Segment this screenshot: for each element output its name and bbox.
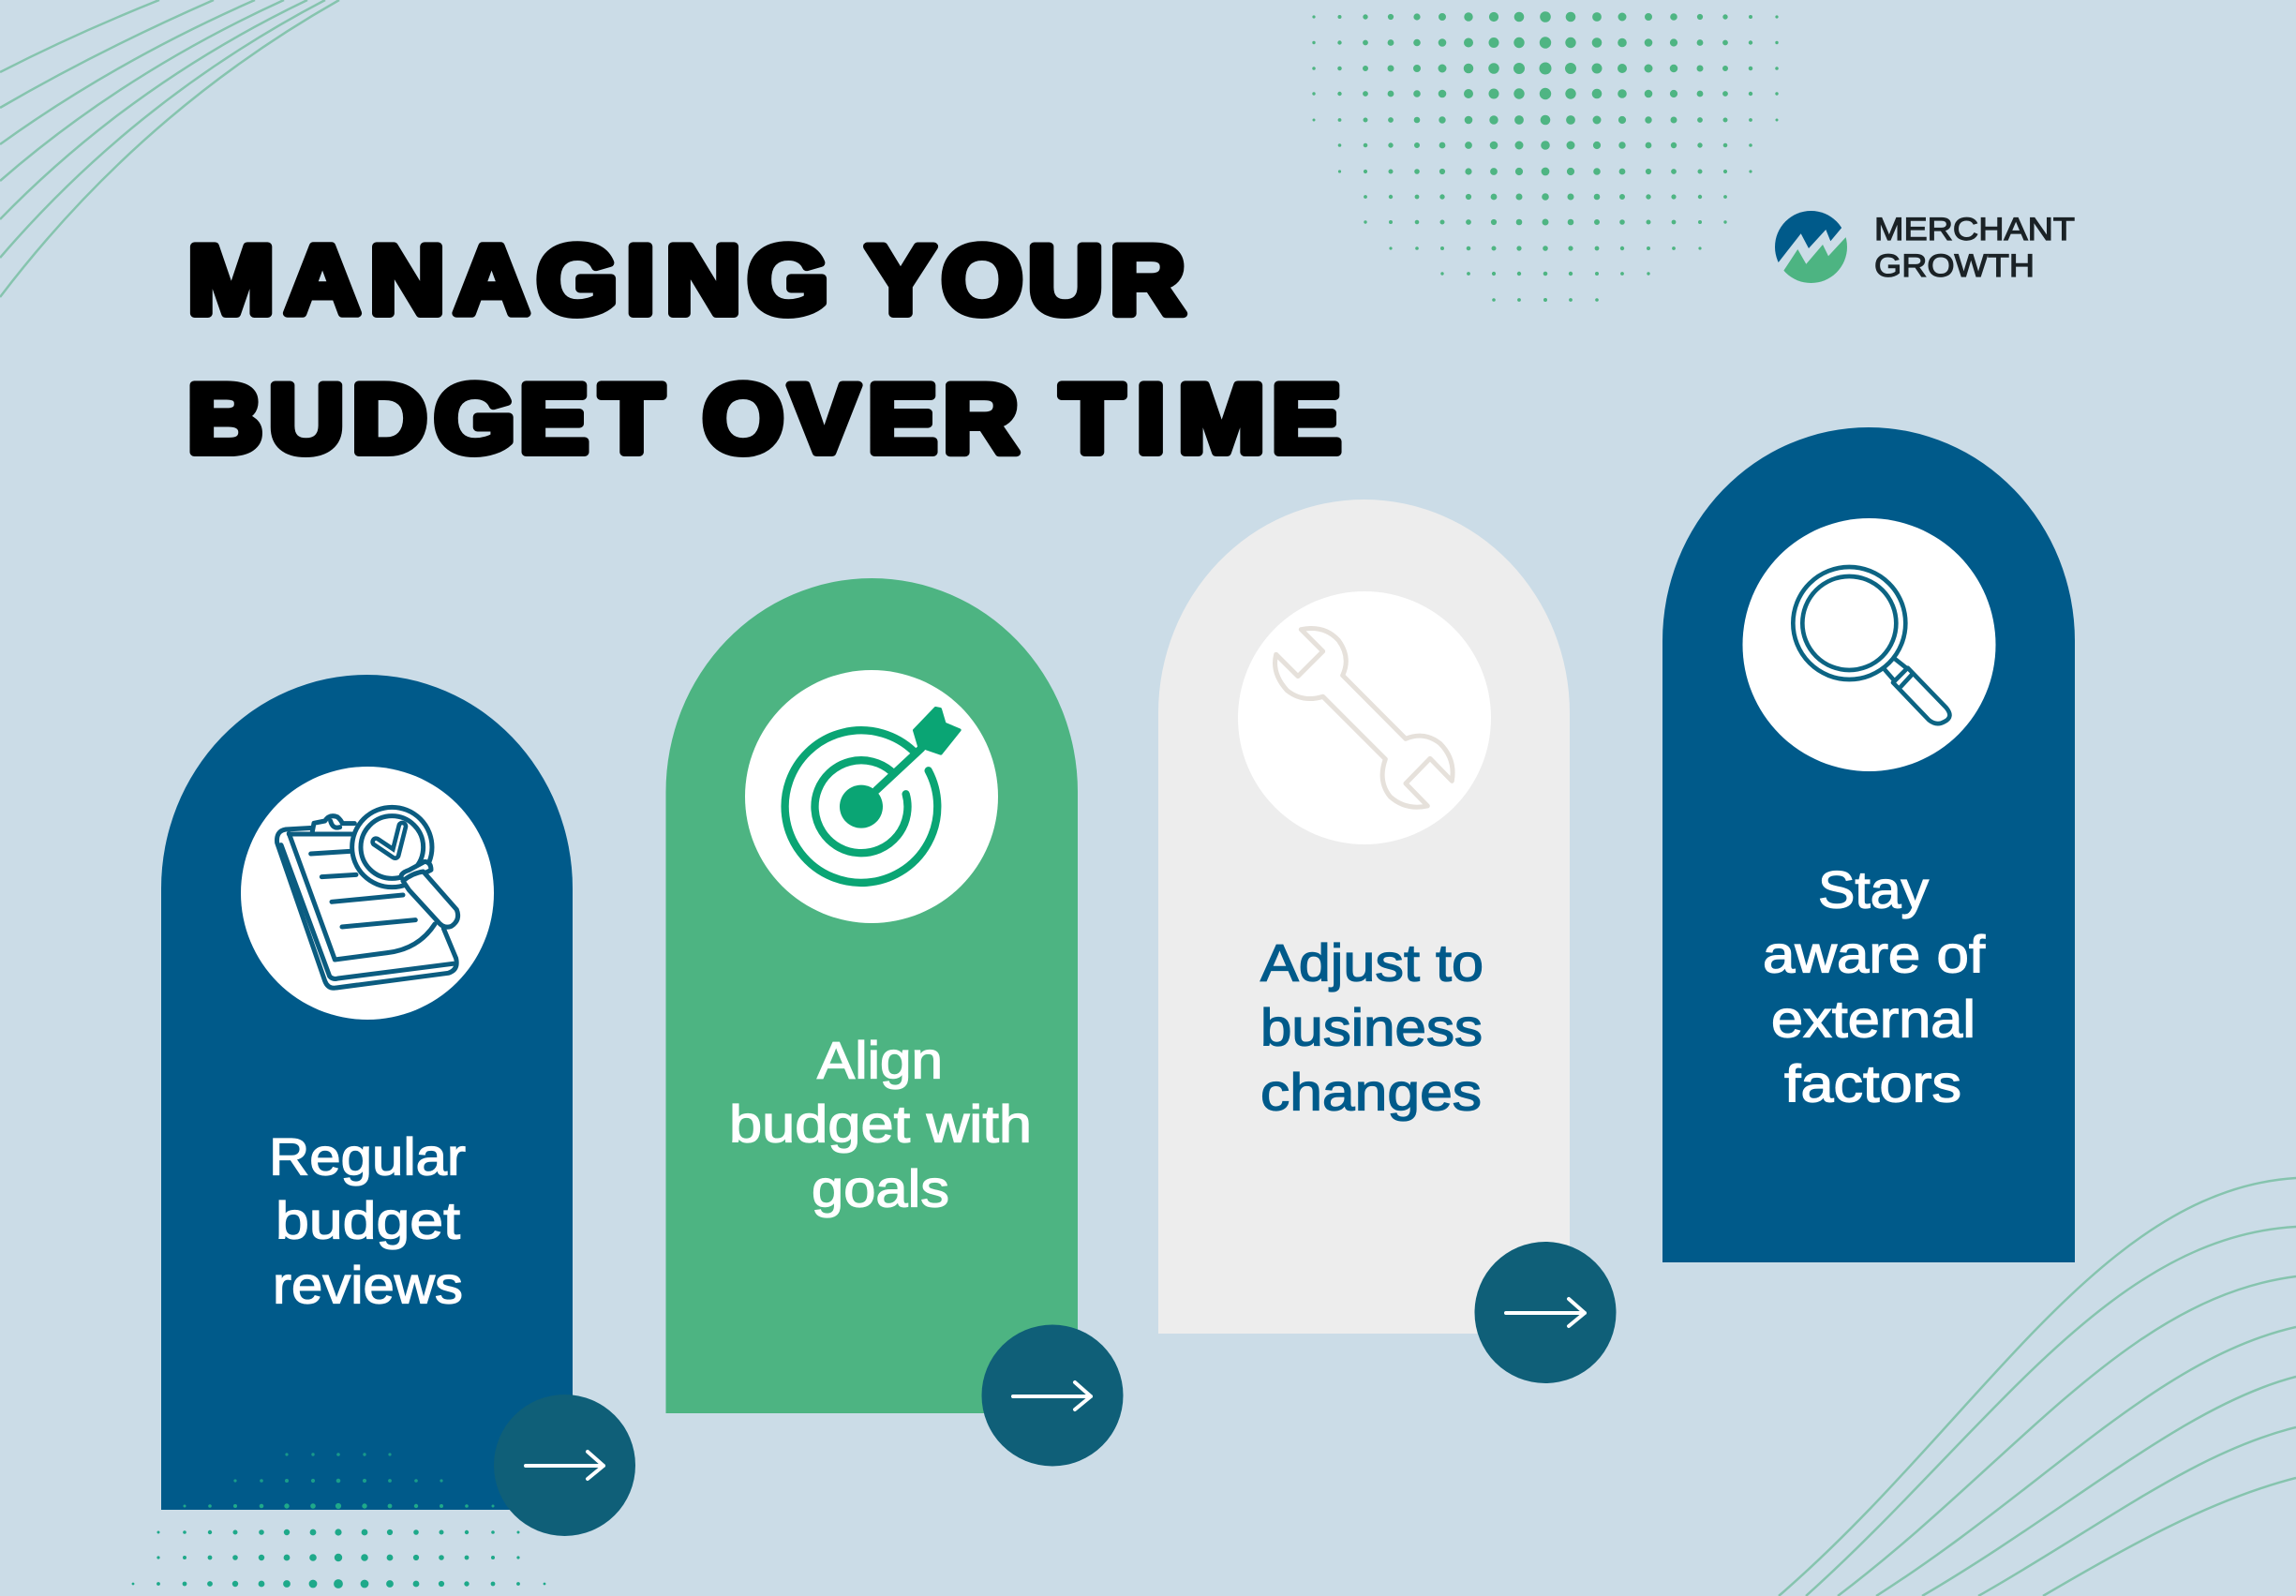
panel: step 3 card xyxy=(1158,500,1570,1334)
icon: wrench xyxy=(1275,629,1453,807)
step text: budget xyxy=(276,1190,461,1250)
icon: clipboard with magnifier xyxy=(277,807,458,988)
step text: reviews xyxy=(273,1256,463,1314)
panel: step 1 card xyxy=(161,675,573,1510)
icon: magnifying glass xyxy=(1793,567,1949,723)
step text: external xyxy=(1771,990,1975,1048)
halftone dots: top xyxy=(1313,12,1778,301)
card shape xyxy=(1158,500,1570,1334)
logo text xyxy=(1874,212,2075,284)
step text: Stay xyxy=(1818,860,1929,918)
icon circle xyxy=(745,670,998,923)
title: BUDGET OVER TIME xyxy=(187,365,1341,473)
panel: step 4 card xyxy=(1662,427,2075,1262)
step text: factors xyxy=(1784,1053,1961,1113)
decorative curves: top left xyxy=(0,0,339,297)
icon: target with arrow xyxy=(785,709,960,883)
arrow button: step 1 xyxy=(494,1395,635,1536)
step text xyxy=(1260,933,1483,1121)
step text: Adjust to xyxy=(1260,933,1483,992)
step text: Align xyxy=(817,1031,943,1089)
step text xyxy=(729,1031,1032,1218)
halftone dots: bottom xyxy=(132,1454,545,1588)
step text: business xyxy=(1260,997,1483,1057)
title xyxy=(187,226,1341,473)
icon circle xyxy=(1743,518,1996,771)
panel: step 2 card xyxy=(665,578,1078,1413)
card shape xyxy=(665,578,1078,1413)
logo text: MERCHANT xyxy=(1874,212,2075,247)
step text: Regular xyxy=(269,1126,466,1186)
decorative curves: bottom right xyxy=(1779,1178,2296,1596)
arrow button: step 3 xyxy=(1475,1242,1616,1383)
logo mark xyxy=(1775,211,1847,283)
step text xyxy=(1763,860,1985,1113)
step text: budget with xyxy=(729,1095,1032,1153)
icon circle xyxy=(241,767,494,1020)
step text: goals xyxy=(812,1158,949,1218)
arrow button: step 2 xyxy=(982,1325,1123,1466)
icon circle xyxy=(1238,591,1491,844)
card shape xyxy=(161,675,573,1510)
logo: Merchant Growth xyxy=(1775,211,2075,283)
card shape xyxy=(1662,427,2075,1262)
title: MANAGING YOUR xyxy=(187,226,1185,335)
logo text: GROWTH xyxy=(1874,248,2035,284)
step text: aware of xyxy=(1763,924,1985,984)
step text xyxy=(269,1126,466,1314)
step text: changes xyxy=(1260,1063,1482,1121)
